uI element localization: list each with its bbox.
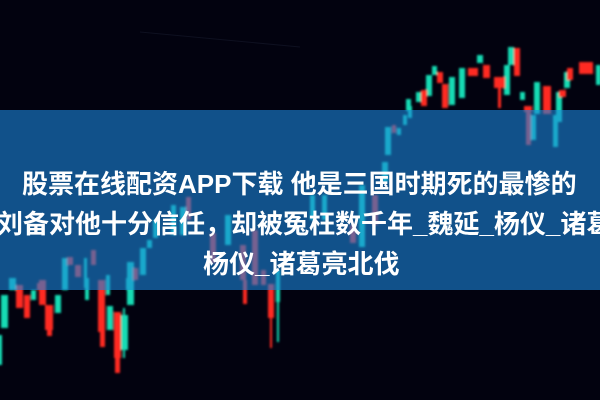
title line 2: 刘备对他十分信任，却被冤枉数千年_魏延_杨仪_诸葛	[0, 209, 600, 239]
title line 3: 杨仪_诸葛亮北伐	[203, 249, 399, 279]
title line 1: 股票在线配资APP下载 他是三国时期死的最惨的	[22, 169, 577, 199]
